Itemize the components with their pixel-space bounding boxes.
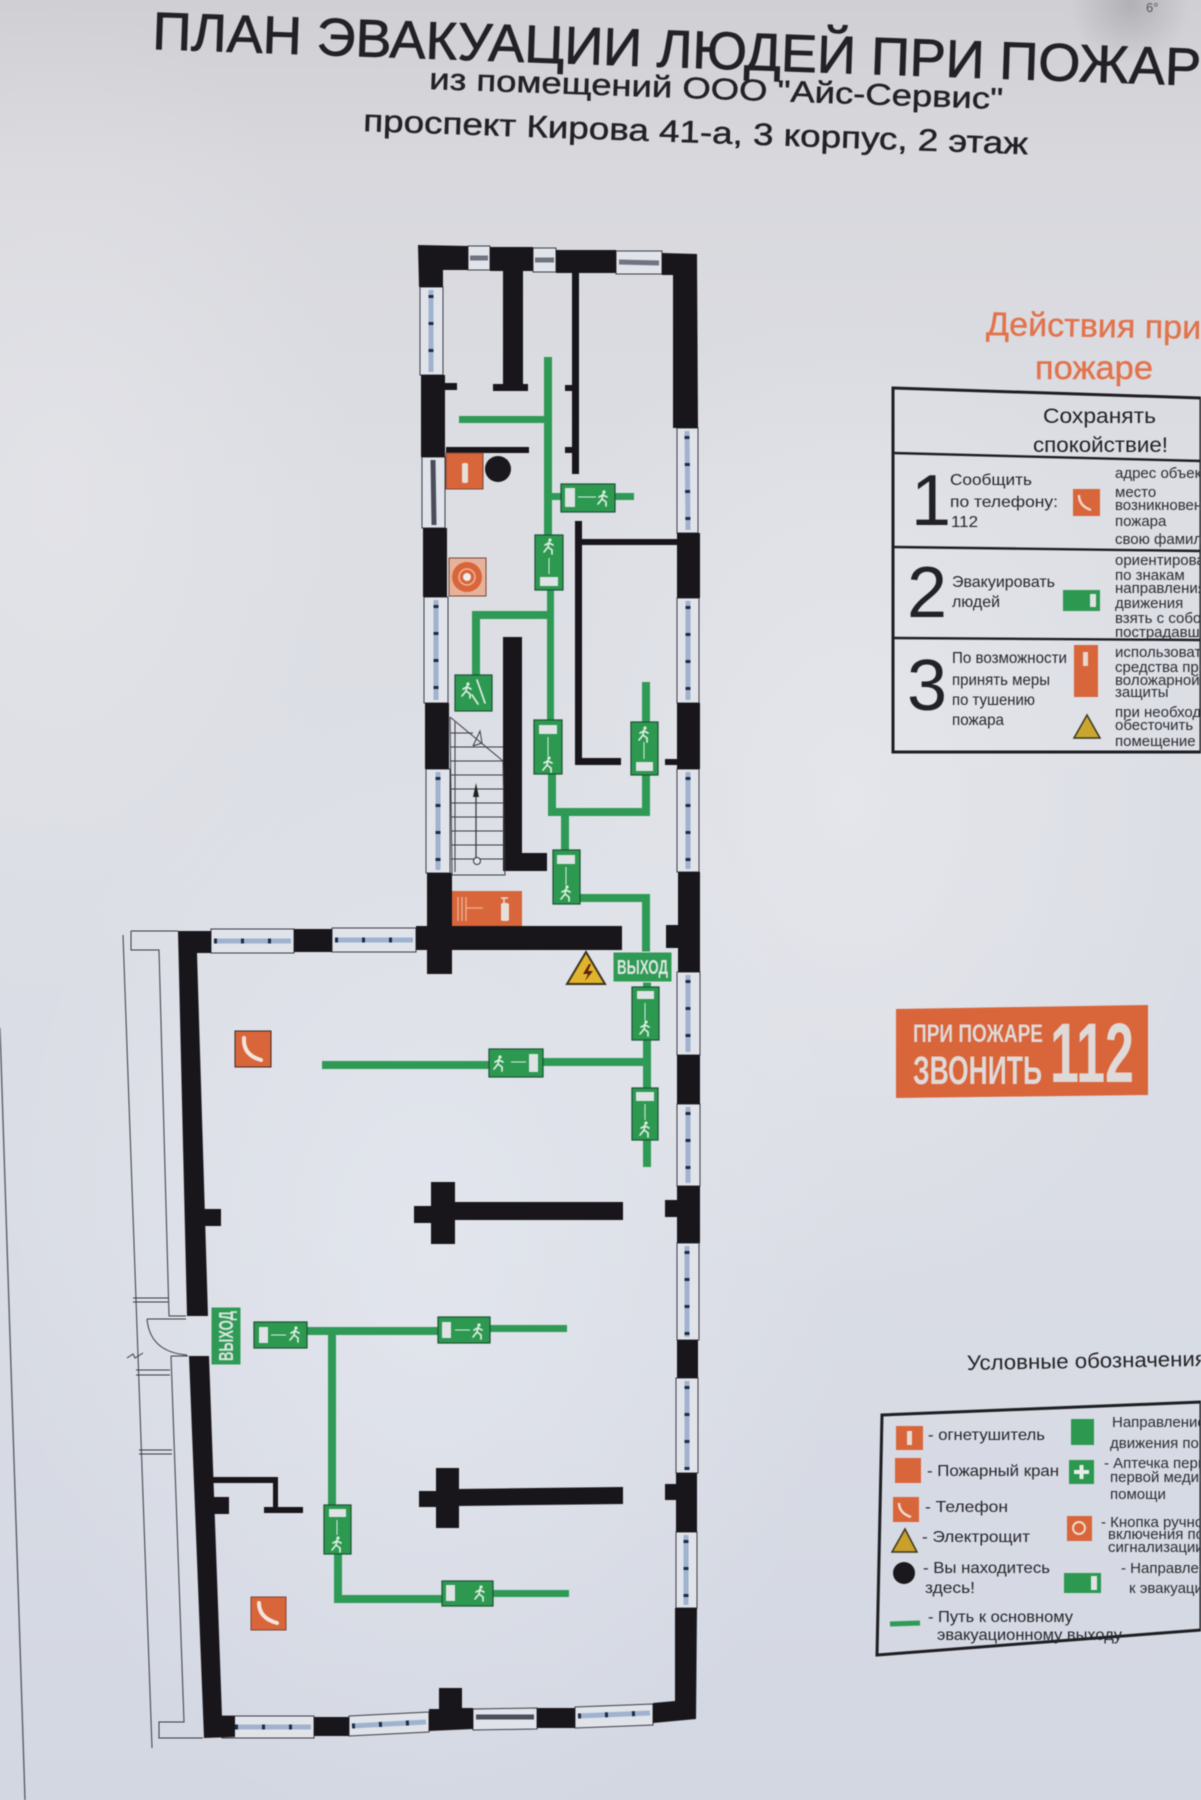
legend: direction of movement: движения по <box>1110 1435 1199 1452</box>
exit sign: upper <box>613 952 672 982</box>
legend: route: - Путь к основному <box>928 1609 1073 1626</box>
legend: you are here <box>893 1560 1050 1597</box>
legend heading: Условные обозначения <box>967 1348 1201 1375</box>
banner: call 112: 112 <box>1050 1006 1134 1100</box>
legend: first aid <box>1069 1455 1201 1503</box>
step 3: принять меры <box>952 672 1050 689</box>
step 3: обесточить <box>1115 717 1193 734</box>
legend: telephone: - Телефон <box>925 1499 1008 1516</box>
icon: fire alarm button <box>449 558 486 596</box>
title: ПЛАН ЭВАКУАЦИИ ЛЮДЕЙ ПРИ ПОЖАРЕ <box>152 0 1201 99</box>
floor plan <box>123 245 700 1748</box>
step 3: по тушению <box>952 692 1035 709</box>
step 3: 3 <box>907 646 947 726</box>
keep calm: Сохранять <box>1043 405 1156 428</box>
keep calm: спокойствие! <box>1033 434 1168 457</box>
heading: actions in case of fire <box>986 305 1201 386</box>
legend: route: эвакуационному выходу <box>937 1627 1122 1644</box>
subtitle: address: проспект Кирова 41-а, 3 корпус, 2 этаж <box>363 103 1029 161</box>
you are here marker <box>485 456 511 482</box>
panel: legend <box>877 1402 1201 1655</box>
step 2: Эвакуировать <box>952 574 1055 591</box>
banner: call 112: ЗВОНИТЬ <box>913 1049 1042 1093</box>
heading: actions in case of fire: Действия при <box>986 305 1201 346</box>
legend: you are here: - Вы находитесь <box>923 1560 1050 1577</box>
staircase <box>450 717 505 875</box>
icon: phone lower <box>251 1597 286 1630</box>
legend: fire hydrant: - Пожарный кран <box>927 1463 1059 1480</box>
panel: actions table <box>893 388 1201 752</box>
step 1: место <box>1115 484 1156 501</box>
exit direction signs <box>254 484 659 1606</box>
step 2: движения <box>1115 595 1183 612</box>
exit sign: west door <box>211 1307 241 1365</box>
exit sign: west door: ВЫХОД <box>216 1311 238 1361</box>
legend: extinguisher <box>896 1426 1045 1450</box>
icon: fire extinguisher <box>487 891 522 926</box>
step 2: по знакам <box>1115 567 1185 584</box>
step 2 <box>907 552 1201 641</box>
icon: electrical panel <box>567 952 605 984</box>
icon: fire hose <box>452 891 487 926</box>
legend: you are here: здесь! <box>925 1580 975 1597</box>
outer annex drawing <box>123 931 203 1748</box>
legend: electrical panel: - Электрощит <box>922 1529 1031 1546</box>
step 3: защиты <box>1115 684 1169 701</box>
legend: direction of movement <box>1071 1414 1201 1452</box>
step 3: воложарной <box>1115 672 1200 689</box>
paper edge line <box>0 1028 25 1800</box>
legend: first aid: помощи <box>1110 1486 1166 1503</box>
step 1: по телефону: <box>950 494 1058 511</box>
step 3: помещение <box>1115 733 1196 750</box>
legend: alarm button <box>1067 1514 1201 1556</box>
step 3: пожара <box>952 712 1004 729</box>
corner note: 6° <box>1146 0 1158 15</box>
step 1: пожара <box>1115 513 1167 530</box>
step 1: Сообщить <box>950 472 1032 489</box>
banner: call 112 <box>896 1005 1148 1100</box>
legend: route <box>890 1609 1122 1644</box>
legend: fire hydrant <box>895 1458 1059 1483</box>
step 2: людей <box>952 594 1000 611</box>
windows <box>211 246 700 1738</box>
exit sign: upper: ВЫХОД <box>617 957 668 979</box>
step 1: 112 <box>951 514 978 531</box>
evacuation routes <box>307 357 651 1603</box>
banner: call 112: ПРИ ПОЖАРЕ <box>913 1020 1043 1048</box>
walls <box>178 245 700 1738</box>
step 2: 2 <box>907 553 947 633</box>
legend: telephone <box>893 1497 1008 1522</box>
heading: actions in case of fire: пожаре <box>1035 349 1153 386</box>
step 3: По возможности <box>952 650 1067 667</box>
keep calm <box>1033 405 1168 457</box>
subtitle: organisation: из помещений ООО "Айс-Сервис" <box>429 63 1004 116</box>
legend: extinguisher: - огнетушитель <box>928 1427 1045 1444</box>
step 1: 1 <box>911 461 951 541</box>
legend: direction to exit <box>1064 1560 1201 1597</box>
step 1 <box>911 461 1201 548</box>
icon: extinguisher <box>446 453 483 489</box>
legend: alarm button: сигнализации <box>1108 1539 1201 1556</box>
legend: electrical panel <box>892 1529 1031 1552</box>
icon: phone upper <box>235 1031 271 1067</box>
step 3 <box>907 644 1201 750</box>
